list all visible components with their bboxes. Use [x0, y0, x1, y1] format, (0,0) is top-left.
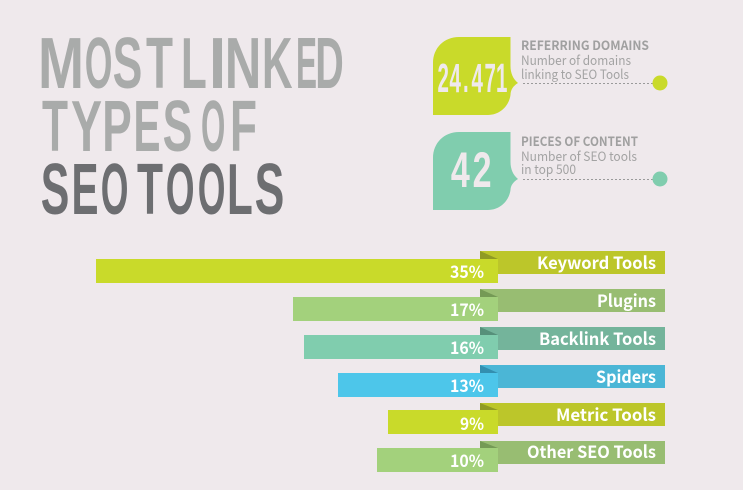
stat description: tools: Number of SEO tools: [521, 146, 637, 165]
stat heading: pieces of content: PIECES OF CONTENT: [521, 131, 638, 150]
callout shape: lime: [433, 37, 518, 115]
title: E: [134, 86, 160, 167]
stat description: tools: [521, 146, 637, 178]
title: O: [166, 149, 194, 230]
stat description: domains: [521, 50, 631, 83]
callout shape: teal: [433, 132, 518, 210]
title: S: [41, 149, 69, 230]
title: [38, 23, 344, 230]
bar: plugins 17%: 17%: [450, 296, 484, 321]
title: L: [227, 149, 253, 230]
bar: metric tools 9%: [388, 401, 665, 435]
title: O: [201, 86, 225, 167]
bar: other seo tools 10%: 10%: [450, 447, 484, 472]
bar: keyword tools 35%: Keyword Tools: [537, 249, 656, 274]
bar: backlink tools 16%: 16%: [450, 334, 484, 359]
bar: keyword tools 35%: [96, 249, 665, 283]
bar: other seo tools 10%: [377, 438, 665, 472]
title: N: [225, 23, 261, 104]
dotted connector with lime dot: [523, 76, 668, 90]
bar: metric tools 9%: Metric Tools: [556, 401, 656, 426]
title: O: [85, 23, 112, 104]
title: F: [230, 86, 257, 167]
bar: spiders 13%: 13%: [450, 372, 484, 397]
title: K: [262, 23, 292, 104]
title: S: [163, 86, 192, 167]
title: S: [113, 23, 142, 104]
stat number: 24.471: 24.471: [438, 55, 507, 101]
bar chart: [96, 249, 665, 472]
title: D: [315, 23, 344, 104]
title: Y: [71, 86, 102, 167]
bar: metric tools 9%: 9%: [460, 410, 484, 435]
title: O: [198, 149, 226, 230]
stat description: tools: in top 500: [521, 159, 576, 178]
bar: plugins 17%: Plugins: [597, 287, 656, 312]
title: T: [137, 149, 163, 230]
bar: spiders 13%: Spiders: [596, 363, 656, 388]
title: L: [181, 23, 207, 104]
title: P: [102, 86, 132, 167]
title: E: [72, 149, 98, 230]
title: O: [101, 149, 128, 230]
title: I: [209, 23, 226, 104]
stat: referring domains: [433, 35, 668, 115]
stat number: 42: 42: [451, 143, 492, 199]
stat description: domains: linking to SEO Tools: [521, 64, 629, 83]
stat heading: referring domains: REFERRING DOMAINS: [521, 35, 649, 54]
title: M: [38, 23, 84, 104]
bar: plugins 17%: [293, 287, 665, 321]
title: E: [296, 23, 317, 104]
bar: backlink tools 16%: Backlink Tools: [539, 325, 656, 350]
bar: other seo tools 10%: Other SEO Tools: [527, 438, 656, 463]
bar: keyword tools 35%: 35%: [450, 258, 484, 283]
title: S: [255, 149, 284, 230]
title: T: [42, 86, 68, 167]
bar: backlink tools 16%: [304, 325, 665, 359]
stat: pieces of content: [433, 131, 668, 210]
stat description: domains: Number of domains: [521, 50, 631, 69]
bar: spiders 13%: [338, 363, 665, 397]
dotted connector with teal dot: [523, 172, 668, 186]
title: T: [146, 23, 173, 104]
